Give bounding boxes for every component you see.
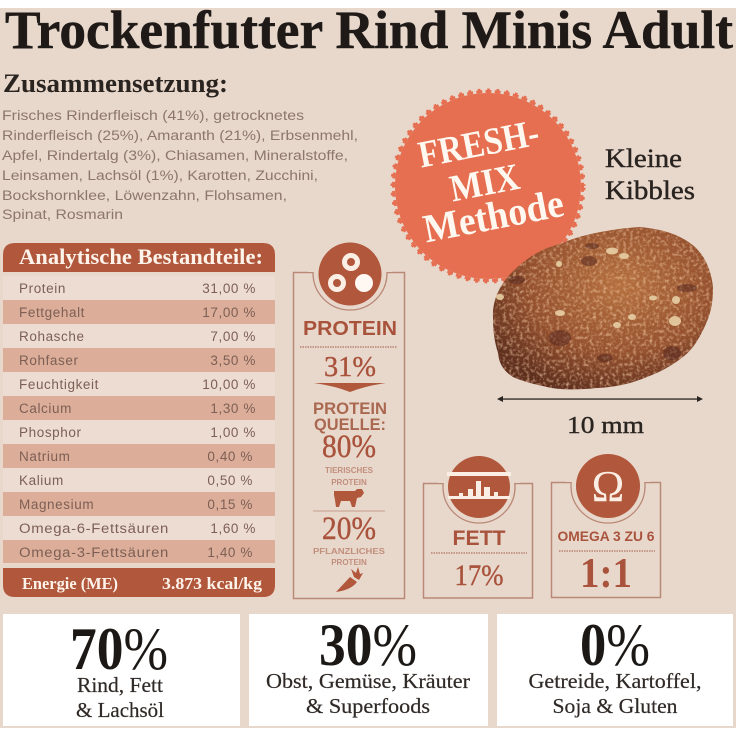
table labels: Feuchtigkeit bbox=[19, 377, 99, 392]
table labels: Omega-6-Fettsäuren bbox=[19, 521, 169, 536]
table values: 17,00 % bbox=[202, 305, 256, 320]
animal protein label: TIERISCHES bbox=[325, 466, 374, 475]
card: 30 percent bbox=[249, 612, 488, 726]
arrow: kibble width bbox=[497, 396, 703, 402]
table values: 0,15 % bbox=[207, 497, 253, 512]
table labels: Phosphor bbox=[19, 425, 82, 440]
text block: ingredients: Rinderfleisch (25%), Amaranth (21%), Erbsenmehl, bbox=[2, 128, 358, 143]
icon: cow bbox=[334, 489, 364, 507]
table labels: Rohfaser bbox=[19, 353, 79, 368]
text block: ingredients: Frisches Rinderfleisch (41%), getrocknetes bbox=[2, 108, 304, 123]
table footer: energy: Energie (ME) bbox=[22, 574, 118, 593]
table values: 10,00 % bbox=[202, 377, 256, 392]
card: 70 percent bbox=[3, 614, 240, 726]
table labels: Protein bbox=[19, 281, 66, 296]
card: 0 percent: 0% bbox=[580, 612, 650, 678]
table values: 1,30 % bbox=[210, 401, 256, 416]
table values: 0,50 % bbox=[207, 473, 253, 488]
animal protein label bbox=[325, 466, 374, 487]
fett value: 17% bbox=[454, 559, 504, 592]
icon: fat bbox=[447, 456, 511, 518]
table labels: Omega-3-Fettsäuren bbox=[19, 545, 169, 560]
table header: Analytische Bestandteile: bbox=[19, 244, 263, 269]
plant protein label bbox=[313, 547, 386, 567]
protein source heading bbox=[313, 400, 387, 434]
table labels: Magnesium bbox=[19, 497, 94, 512]
table labels: Natrium bbox=[19, 449, 70, 464]
table values: 0,40 % bbox=[207, 449, 253, 464]
badge: Fresh-Mix Methode: Methode bbox=[419, 180, 567, 251]
label: 10 mm: 10 mm bbox=[567, 413, 644, 439]
table labels: Fettgehalt bbox=[19, 305, 85, 320]
protein source heading: QUELLE: bbox=[314, 416, 386, 434]
panel: omega bbox=[552, 440, 660, 598]
icon: protein molecules bbox=[318, 242, 382, 306]
card: 70 percent: 70% bbox=[70, 616, 168, 682]
card: 0 percent bbox=[497, 612, 733, 726]
kibble photo bbox=[493, 227, 713, 389]
omega value: 1:1 bbox=[580, 551, 632, 597]
omega heading: OMEGA 3 ZU 6 bbox=[558, 528, 655, 544]
table values: 3,50 % bbox=[210, 353, 256, 368]
badge: Fresh-Mix Methode bbox=[392, 90, 584, 282]
text block: ingredients bbox=[2, 108, 358, 222]
table values bbox=[202, 281, 256, 560]
card: 70 percent: & Lachsöl bbox=[76, 698, 164, 722]
text block: ingredients: Spinat, Rosmarin bbox=[2, 207, 123, 222]
badge: Fresh-Mix Methode: FRESH- bbox=[415, 112, 543, 176]
panel: fett bbox=[424, 440, 532, 598]
table footer: energy: 3.873 kcal/kg bbox=[162, 574, 263, 593]
card: 70 percent: Rind, Fett bbox=[77, 673, 163, 697]
text block: ingredients: Apfel, Rindertalg (3%), Chiasamen, Mineralstoffe, bbox=[2, 148, 348, 163]
table labels: Calcium bbox=[19, 401, 72, 416]
table labels: Kalium bbox=[19, 473, 64, 488]
table values: 1,60 % bbox=[210, 521, 256, 536]
card: 30 percent: Obst, Gemüse, Kräuter bbox=[266, 669, 470, 693]
panel: protein bbox=[294, 230, 404, 598]
card: 0 percent: Soja & Gluten bbox=[552, 694, 678, 718]
label: Kleine Kibbles: Kleine bbox=[605, 144, 682, 173]
table values: 1,40 % bbox=[207, 545, 253, 560]
text block: ingredients: Bockshornklee, Löwenzahn, Flohsamen, bbox=[2, 188, 287, 203]
card: 30 percent: & Superfoods bbox=[306, 694, 430, 718]
ribbon arrow bbox=[314, 383, 386, 392]
animal protein label: PROTEIN bbox=[331, 478, 367, 487]
plant protein label: PROTEIN bbox=[331, 558, 367, 567]
label: Kleine Kibbles: Kibbles bbox=[605, 176, 695, 205]
80 percent: 80% bbox=[322, 429, 376, 465]
table values: 31,00 % bbox=[202, 281, 256, 296]
text block: ingredients: Leinsamen, Lachsöl (1%), Karotten, Zucchini, bbox=[2, 168, 318, 183]
plant protein label: PFLANZLICHES bbox=[313, 547, 386, 556]
protein value: 31% bbox=[324, 351, 376, 383]
table labels: Rohasche bbox=[19, 329, 85, 344]
label: Kleine Kibbles bbox=[605, 144, 695, 205]
card: 0 percent: Getreide, Kartoffel, bbox=[528, 669, 702, 693]
table labels bbox=[19, 281, 169, 560]
icon: carrot bbox=[336, 567, 363, 592]
icon: omega bbox=[576, 454, 640, 518]
icon: omega: Ω bbox=[592, 462, 624, 511]
table values: 1,00 % bbox=[210, 425, 256, 440]
table: Analytische Bestandteile bbox=[3, 243, 275, 597]
fett heading: FETT bbox=[452, 527, 506, 550]
20 percent: 20% bbox=[322, 511, 376, 547]
protein source heading: PROTEIN bbox=[313, 400, 387, 418]
table values: 7,00 % bbox=[210, 329, 256, 344]
title: Trockenfutter Rind Minis Adult bbox=[5, 0, 733, 60]
protein heading: PROTEIN bbox=[303, 318, 397, 340]
badge: Fresh-Mix Methode: MIX bbox=[446, 156, 523, 211]
card: 30 percent: 30% bbox=[319, 612, 417, 678]
table footer: energy bbox=[3, 568, 275, 597]
heading: Zusammensetzung: Zusammensetzung: bbox=[3, 69, 228, 98]
